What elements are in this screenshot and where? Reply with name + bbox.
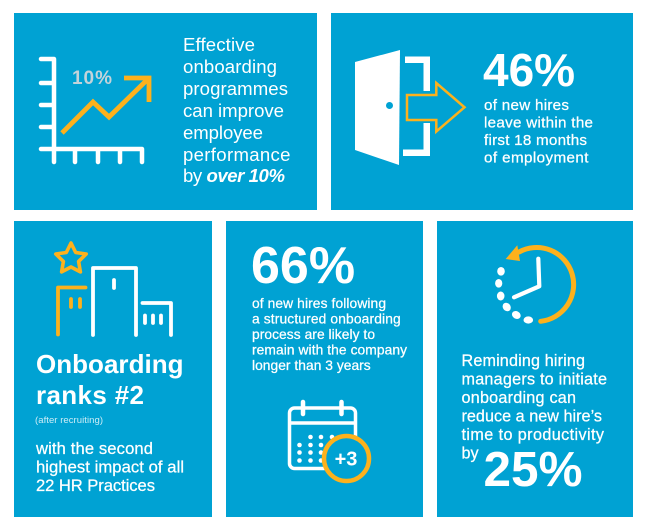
text: performance statement: onboarding: [183, 56, 277, 77]
heading: Onboarding ranks #2: Onboarding: [36, 349, 184, 379]
text: reminding hiring managers: time to productivity: [462, 426, 605, 444]
heading: Onboarding ranks #2: ranks #2: [36, 380, 144, 410]
text: second highest impact: [35, 439, 184, 495]
statistic: 25%: 25%: [484, 442, 583, 497]
text: structured onboarding retention: process are likely to: [252, 327, 375, 342]
text: performance statement: performance: [183, 144, 290, 165]
text: performance statement: by over 10%: [183, 165, 285, 186]
text: leave within 18 months: leave within the: [484, 114, 593, 132]
text: reminding hiring managers: reduce a new hire’s: [462, 408, 602, 426]
text: reminding hiring managers: Reminding hiring: [462, 352, 585, 370]
text: second highest impact: with the second: [35, 439, 153, 458]
text: reminding hiring managers: [462, 352, 607, 462]
text: structured onboarding retention: a structured onboarding: [252, 312, 401, 326]
text: reminding hiring managers: by: [462, 444, 480, 462]
icon: calendar plus 3: [290, 402, 369, 481]
text: leave within 18 months: [484, 97, 593, 166]
text: leave within 18 months: of new hires: [484, 97, 569, 114]
text: structured onboarding retention: of new hires following: [252, 296, 386, 311]
text: second highest impact: 22 HR Practices: [36, 476, 155, 495]
icon: growth chart: [41, 59, 149, 162]
text: structured onboarding retention: [252, 296, 407, 373]
statistic: 46%: 46%: [483, 44, 575, 96]
icon: clock with reverse arrow: [495, 245, 574, 324]
icon: calendar plus 3: +3: [335, 448, 357, 470]
panel: new hires leaving: [331, 13, 633, 210]
panel: employee performance: [14, 13, 317, 210]
statistic: 66%: 66%: [251, 237, 355, 295]
icon: door with exit arrow: [355, 50, 464, 165]
text: performance statement: [183, 34, 290, 186]
heading: Onboarding ranks #2: [36, 349, 184, 410]
panel: onboarding rank: [14, 221, 212, 517]
text: performance statement: Effective: [183, 34, 255, 55]
text: leave within 18 months: of employment: [484, 150, 589, 166]
text: leave within 18 months: first 18 months: [484, 132, 587, 149]
note: after recruiting: (after recruiting): [35, 415, 103, 426]
text: performance statement: programmes: [183, 78, 288, 99]
icon: growth chart: 10%: [72, 68, 112, 89]
text: structured onboarding retention: remain with the company: [252, 343, 407, 358]
text: performance statement: can improve: [183, 100, 284, 121]
panel: time to productivity: [437, 221, 633, 517]
text: reminding hiring managers: onboarding can: [462, 389, 576, 407]
panel: retention: [226, 221, 423, 517]
icon: buildings with star: [56, 243, 171, 335]
text: reminding hiring managers: managers to initiate: [462, 370, 607, 388]
text: performance statement: employee: [183, 122, 263, 143]
text: structured onboarding retention: longer than 3 years: [252, 358, 371, 373]
text: second highest impact: highest impact of all: [36, 458, 184, 476]
